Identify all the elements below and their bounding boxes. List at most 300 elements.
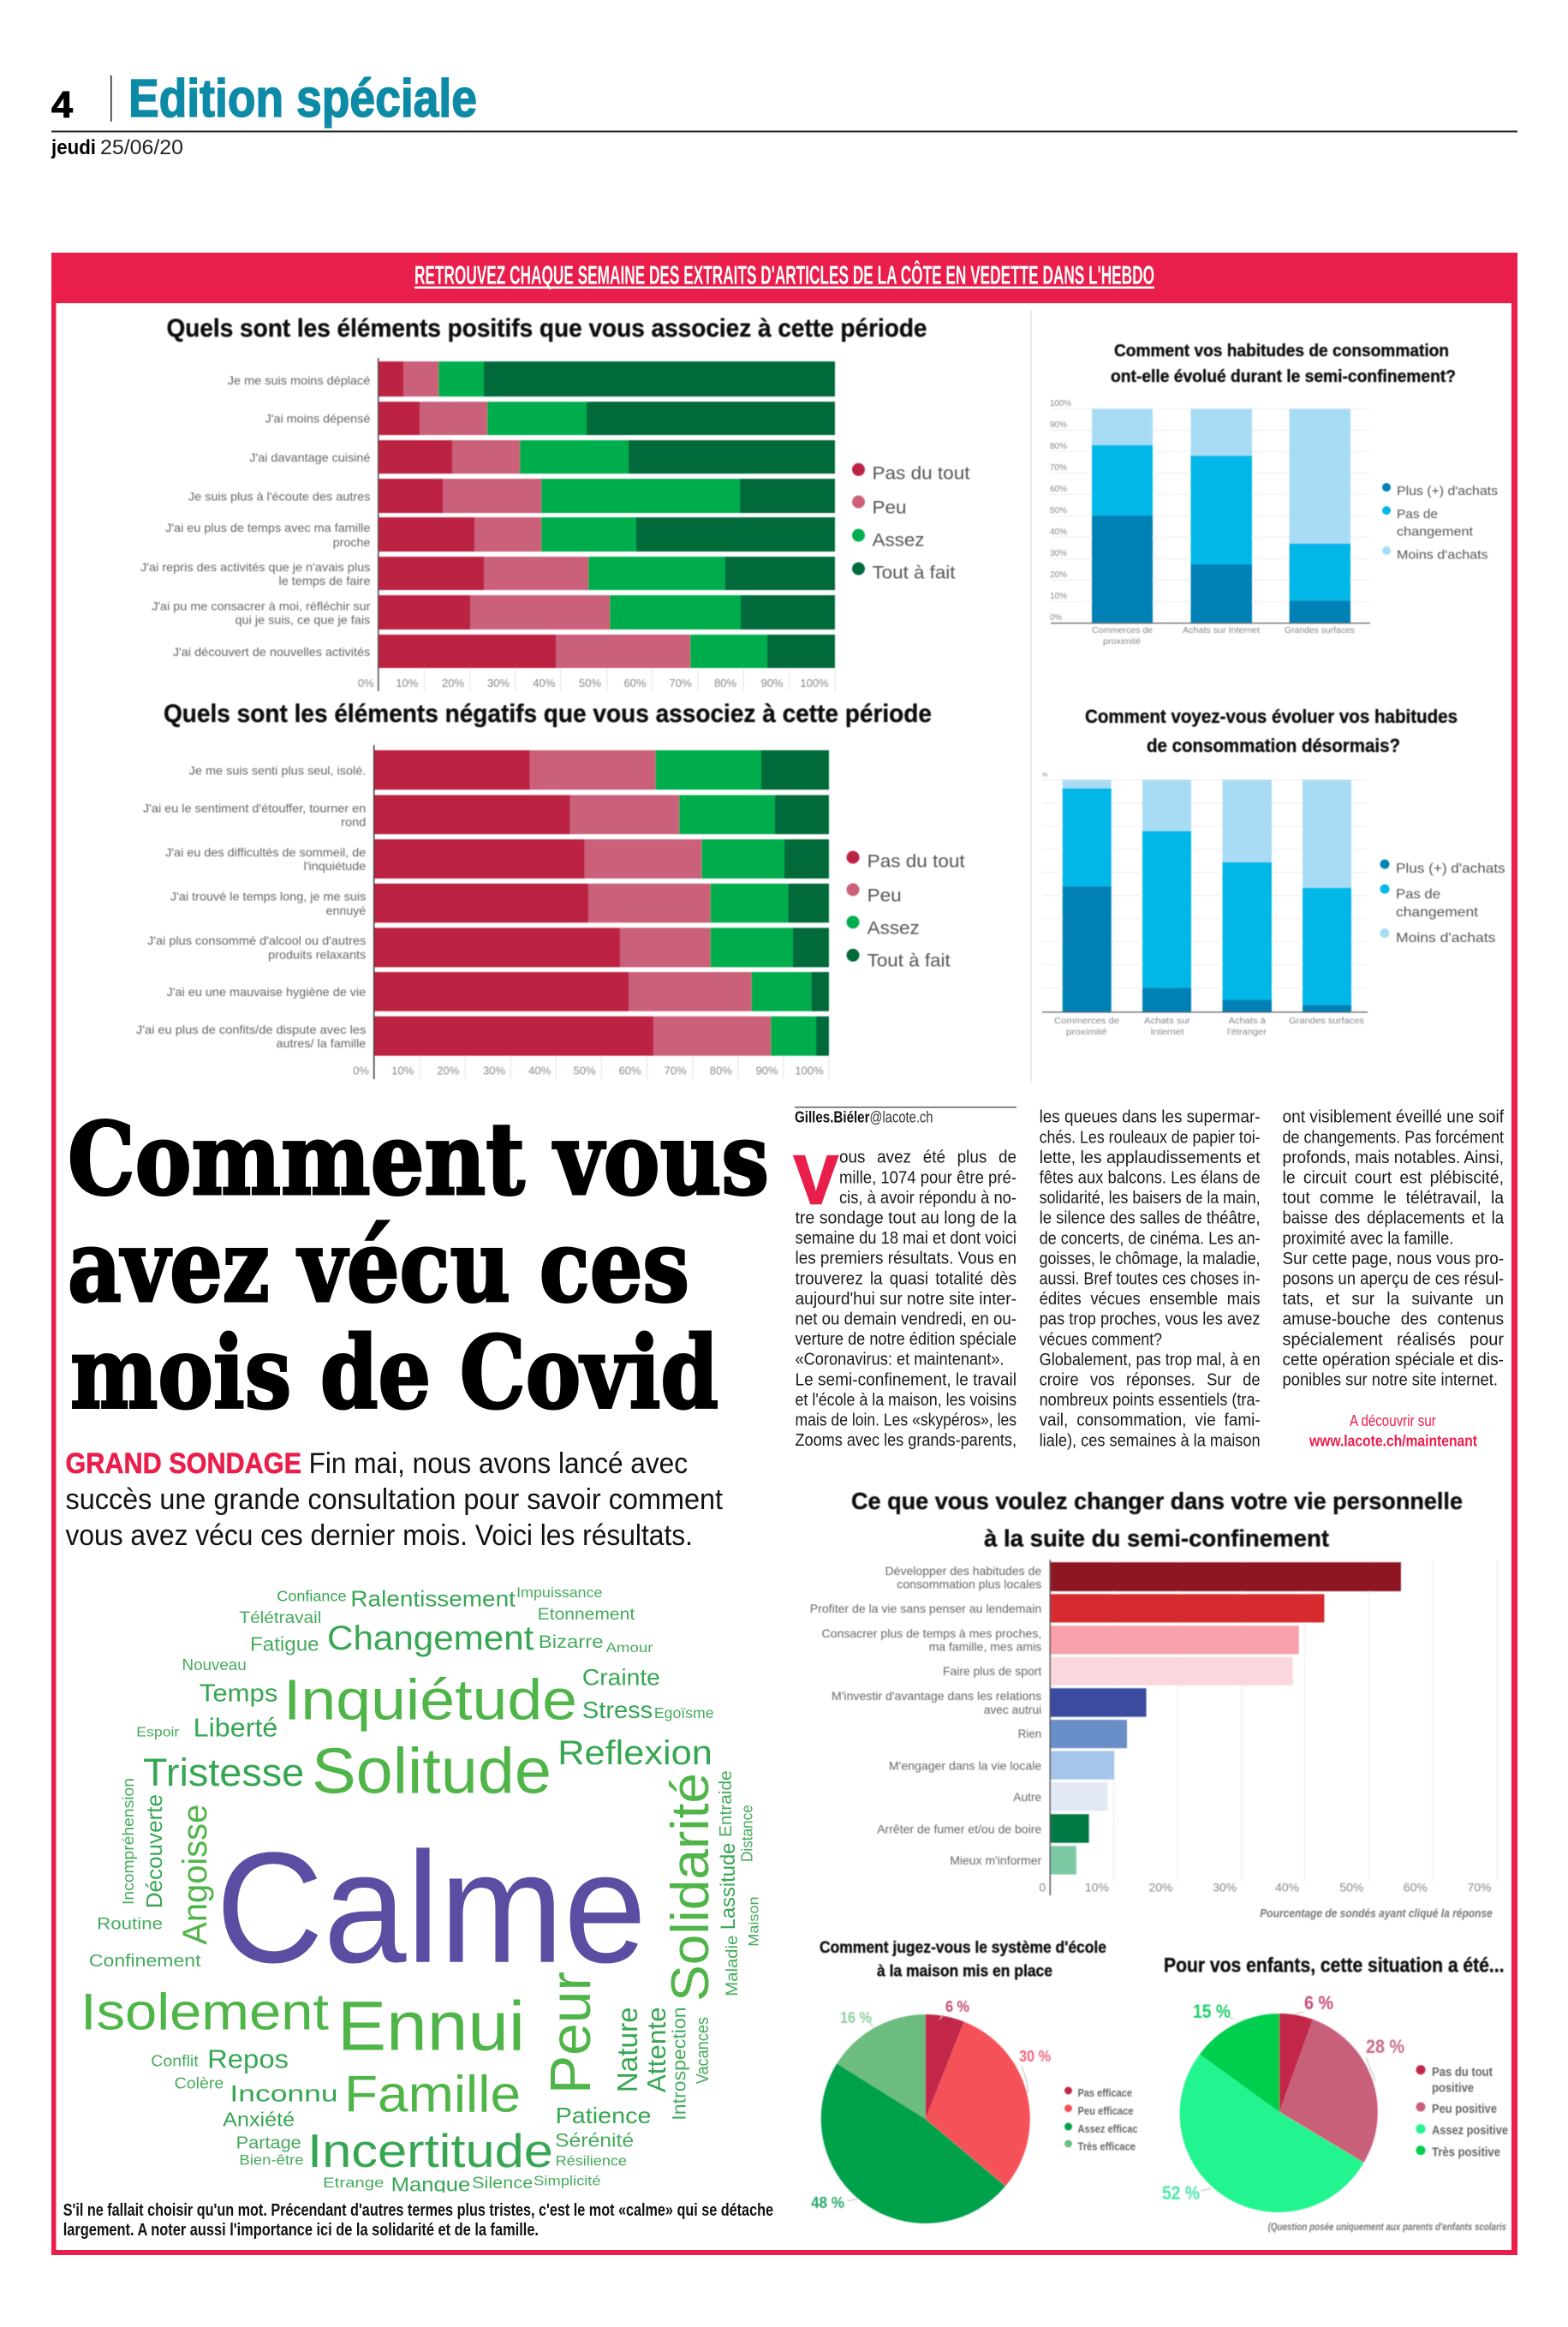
percent axis: 50% [1050,506,1067,516]
word cloud: Solidarité [661,1773,720,2002]
row labels: J'ai eu une mauvaise hygiène de vie [166,985,367,999]
article column 1: net ou demain vendredi, en ou- [795,1310,1017,1329]
link callout [1309,1412,1477,1450]
row labels: J'ai moins dépensé [265,411,371,425]
word cloud: Impuissance [516,1585,603,1601]
percent axis: 0 [1039,1881,1046,1894]
article column 2: fêtes aux balcons. Les élans de [1040,1168,1261,1187]
article column 1: mais de loin. Les «skypéros», les [795,1411,1017,1430]
row labels [136,764,367,1050]
word cloud: Inquiétude [283,1668,577,1732]
row labels: J'ai eu plus de temps avec ma famille [165,521,371,534]
date: jeudi [51,136,96,159]
legend [852,463,970,582]
word cloud: Attente [641,2007,671,2092]
horizontal bars [1050,1562,1401,1875]
percent axis: 30% [487,677,510,689]
legend [1380,860,1505,946]
legend: Pas de [1397,507,1438,522]
chart: positive elements [140,314,970,691]
word cloud: Bizarre [539,1632,603,1652]
row labels: J'ai eu des difficultés de sommeil, de [165,845,367,859]
percent axis: 20% [1050,570,1067,580]
article column 3: baisse des déplacements et la [1283,1209,1505,1228]
word cloud: Angoisse [176,1805,214,1945]
word cloud caption [63,2201,773,2240]
word cloud: Solitude [312,1734,551,1806]
row labels [140,373,371,659]
percentage labels [811,1998,1051,2211]
percent axis: 60% [623,677,647,689]
word cloud: Entraide [717,1770,736,1837]
row labels: Mieux m'informer [950,1853,1042,1867]
article column 2: les queues dans les supermar- [1040,1108,1261,1127]
standfirst [65,1447,724,1552]
word cloud: Maison [746,1896,762,1947]
column labels: Achats sur Internet [1183,626,1260,635]
main headline: avez vécu ces [68,1208,689,1325]
legend [1064,2086,1137,2153]
article column 2: de concerts, de cinéma. Les an- [1040,1229,1261,1248]
legend: Assez efficac [1077,2122,1137,2135]
row labels: avec autrui [984,1703,1041,1716]
word cloud: Routine [97,1914,163,1933]
percent axis: 80% [714,677,736,689]
standfirst: succès une grande consultation pour savoir comment [65,1483,724,1516]
pie [1180,2014,1378,2212]
word cloud: Distance [738,1805,755,1862]
legend: Pas du tout [867,852,965,872]
word cloud: Télétravail [239,1608,321,1627]
percent axis: 10% [396,677,419,689]
article column 3 [1283,1108,1505,1389]
column labels [1092,626,1355,647]
legend: positive [1432,2081,1474,2095]
word cloud: Ennui [337,1987,525,2065]
article column 2: liale), ces semaines à la maison [1040,1431,1261,1450]
legend: Plus (+) d'achats [1397,484,1498,498]
article column 2: vail, consommation, vie fami- [1040,1411,1261,1430]
legend: Peu efficace [1077,2104,1134,2117]
percent axis: 30% [1050,549,1067,558]
word cloud caption: largement. A noter aussi l'importance ici de la solidarité et de la famille. [63,2221,539,2240]
drop cap: V [794,1142,838,1218]
article column 1: Zooms avec les grands-parents, [795,1431,1017,1450]
article byline [795,1107,1017,1126]
word cloud: Nouveau [182,1656,247,1674]
row labels: l'inquiétude [303,859,367,873]
legend: Très efficace [1077,2139,1136,2153]
chart title: à la maison mis en place [877,1963,1052,1981]
column labels: proximité [1103,637,1141,647]
word cloud [80,1585,762,2195]
article column 1: verture de notre édition spéciale [795,1330,1017,1349]
row labels: Développer des habitudes de [885,1564,1041,1578]
percentage labels: 6 % [1304,1992,1333,2014]
row labels: J'ai davantage cuisiné [249,450,371,464]
row labels: Faire plus de sport [943,1664,1041,1678]
word cloud: Résilience [556,2154,627,2169]
legend: Tout à fait [872,563,956,582]
axis note: Pourcentage de sondés ayant cliqué la réponse [1260,1906,1493,1920]
row labels: J'ai plus consommé d'alcool ou d'autres [147,934,366,947]
word cloud: Ralentissement [350,1586,516,1612]
word cloud: Découverte [141,1794,167,1908]
percent axis: 50% [579,677,601,689]
percent axis: 90% [1050,421,1067,430]
chart: future consumption [1042,706,1505,1037]
percent axis: 0% [358,677,374,689]
article column 2: chés. Les rouleaux de papier toi- [1040,1128,1261,1147]
word cloud: Amour [606,1641,653,1656]
word cloud: Silence [472,2175,533,2193]
legend: Assez [872,531,925,551]
percent axis: 40% [533,677,556,689]
row labels: qui je suis, ce que je fais [235,613,370,627]
chart title: Comment voyez-vous évoluer vos habitudes [1085,706,1458,727]
page header [51,69,1517,159]
stacked columns [1092,409,1350,623]
percent axis: 10% [1085,1881,1109,1894]
article column 3: ont visiblement éveillé une soif [1283,1108,1504,1127]
article column 2: le silence des salles de théâtre, [1040,1209,1261,1228]
article column 3: le circuit court est plébiscité, [1283,1168,1504,1187]
percent axis: 30% [1213,1881,1237,1894]
article column 1: tre sondage tout au long de la [795,1209,1017,1228]
word cloud: Repos [207,2044,289,2073]
percent axis [1050,399,1071,623]
percent axis [358,677,829,689]
word cloud: Etrange [323,2175,384,2191]
chart title: Quels sont les éléments positifs que vous associez à cette période [166,314,927,343]
word cloud: Confiance [277,1587,346,1604]
percent axis: 100% [795,1064,824,1077]
link callout: A découvrir sur [1350,1412,1436,1429]
article column 1: trouverez la quasi totalité dès [795,1269,1017,1288]
chart title: de consommation désormais? [1147,735,1400,756]
row labels: proche [333,535,371,549]
column labels: Commerces de [1092,626,1153,635]
legend: Moins d'achats [1397,548,1488,562]
chart: what you want to change [810,1488,1497,1920]
column labels: Commerces de [1054,1017,1119,1026]
row labels: le temps de faire [279,574,371,588]
chart: consumption during semi-confinement [1050,342,1498,647]
percent axis: 0% [1050,613,1062,623]
column labels: l'étranger [1227,1028,1267,1037]
column labels: Achats à [1229,1017,1266,1026]
percent axis: 40% [1275,1881,1299,1894]
percent axis: 90% [756,1064,778,1077]
chart title: à la suite du semi-confinement [984,1524,1329,1552]
main headline: Comment vous [68,1101,769,1218]
word cloud: Lassitude [717,1843,740,1930]
word cloud: Confinement [89,1952,201,1971]
word cloud: Reflexion [557,1734,712,1772]
word cloud: Vacances [694,2017,712,2084]
row labels [810,1564,1042,1867]
percentage labels: 15 % [1193,2001,1231,2022]
percent axis: 40% [1050,528,1067,537]
word cloud: Introspection [668,2007,690,2121]
word cloud: Incertitude [307,2124,553,2177]
row labels: J'ai repris des activités que je n'avais plus [140,560,370,574]
chart title: Comment vos habitudes de consommation [1114,342,1449,361]
word cloud: Changement [327,1620,534,1657]
date [51,136,183,159]
word cloud: Stress [582,1697,653,1723]
percent axis [353,1064,824,1077]
percent axis: 100% [800,677,829,689]
row labels: rond [341,815,366,829]
percent axis: 20% [437,1064,460,1077]
legend: Tout à fait [867,952,951,971]
article column 3: amuse-bouche des contenus [1283,1310,1504,1329]
chart title [1111,342,1456,386]
legend [846,851,965,971]
word cloud: Fatigue [250,1632,319,1655]
standfirst: GRAND SONDAGE [65,1447,301,1480]
chart title: Quels sont les éléments négatifs que vous associez à cette période [164,700,932,728]
chart: school at home pie [811,1939,1137,2223]
row labels: autres/ la famille [276,1036,367,1050]
percent axis: 100% [1050,399,1071,409]
percent axis: 60% [1050,485,1067,494]
row labels: J'ai eu plus de confits/de dispute avec les [136,1023,366,1036]
row labels: ma famille, mes amis [929,1640,1041,1654]
stacked columns [1063,779,1351,1012]
word cloud: Peur [539,1972,603,2094]
legend: changement [1397,524,1474,540]
legend: Pas efficace [1077,2086,1132,2099]
article column 3: cette opération spéciale et dis- [1283,1351,1504,1369]
article column 2: vécues comment? [1040,1330,1162,1349]
row labels: Autre [1013,1790,1041,1804]
row labels: Je me suis senti plus seul, isolé. [189,764,366,778]
article column 2 [1040,1108,1261,1450]
word cloud: Isolement [80,1983,329,2040]
word cloud: Colère [175,2073,224,2091]
legend: Pas du tout [872,463,970,483]
article column 3: ponibles sur notre site internet. [1283,1370,1498,1389]
percent axis: 20% [442,677,464,689]
row labels: consommation plus locales [897,1578,1041,1591]
article column 3: Sur cette page, nous vous pro- [1283,1250,1504,1268]
row labels: M'investir d'avantage dans les relations [832,1689,1041,1703]
word cloud caption: S'il ne fallait choisir qu'un mot. Précendant d'autres termes plus tristes, c'est le mot «calme» qui se détache [63,2201,773,2220]
percent axis: 40% [528,1064,551,1077]
article column 3: profonds, mais notables. Ainsi, [1283,1149,1504,1167]
percent axis: 70% [669,677,692,689]
legend: Plus (+) d'achats [1396,862,1505,876]
word cloud: Conflit [151,2053,199,2070]
article column 2: croire vos réponses. Sur de [1040,1370,1261,1389]
legend: Pas du tout [1432,2065,1493,2079]
article column 3: tats, et sur la suivante un [1283,1290,1504,1309]
article column 1 [794,1142,1017,1450]
word cloud: Bien-être [239,2153,304,2169]
word cloud: Incompréhension [120,1778,137,1905]
article column 3: proximité avec la famille. [1283,1229,1453,1248]
stacked bars [379,361,835,668]
standfirst: Fin mai, nous avons lancé avec [309,1447,688,1480]
page number: 4 [51,84,74,126]
column labels: Internet [1151,1028,1184,1037]
row labels: Rien [1018,1727,1041,1740]
percent axis: 80% [710,1064,732,1077]
row labels: Profiter de la vie sans penser au lendemain [810,1602,1041,1615]
percent axis: 10% [1050,592,1067,601]
standfirst: vous avez vécu ces dernier mois. Voici les résultats. [65,1519,693,1552]
column labels: Achats sur [1144,1017,1191,1026]
word cloud: Espoir [136,1725,180,1739]
row labels: ennuyé [326,904,367,917]
word cloud: Nature [611,2007,643,2092]
legend: Assez [867,918,920,938]
percentage labels [1162,1992,1404,2204]
word cloud: Partage [236,2133,301,2152]
percent axis: 60% [619,1064,641,1077]
percent axis: 30% [483,1064,506,1077]
chart: children situation pie [1162,1954,1508,2233]
percent axis: 50% [573,1064,596,1077]
article column 2: nombreux points essentiels (tra- [1040,1391,1261,1410]
row labels: Je me suis moins déplacé [228,373,371,387]
article column 3: de changements. Pas forcément [1283,1128,1504,1147]
article column 1: semaine du 18 mai et dont voici [795,1229,1017,1248]
word cloud: Anxiété [223,2108,295,2130]
percentage labels: 6 % [945,1998,969,2015]
word cloud: Maladie [724,1936,742,1996]
word cloud: Simplicité [534,2175,601,2189]
percent axis: 50% [1339,1881,1363,1894]
percent axis: 60% [1404,1881,1428,1894]
percent axis: 70% [1050,463,1067,473]
percent axis: 80% [1050,442,1067,451]
dominant word: Calme [216,1819,647,1996]
percent axis: 20% [1148,1881,1173,1894]
chart title [820,1939,1106,1981]
word cloud: Egoïsme [654,1704,714,1721]
row labels: J'ai pu me consacrer à moi, réfléchir sur [152,600,371,613]
legend: Peu [872,498,906,517]
row labels: Arrêter de fumer et/ou de boire [877,1822,1041,1835]
article column 1: aujourd'hui sur notre site inter- [795,1290,1017,1309]
percentage labels: 28 % [1366,2036,1404,2057]
row labels: J'ai découvert de nouvelles activités [173,645,370,659]
chart: negative elements [136,700,965,1079]
column labels: proximité [1066,1028,1107,1037]
percent axis: 70% [1467,1881,1492,1894]
article column 1: Le semi-confinement, le travail [795,1370,1017,1389]
percent axis: 0% [353,1064,369,1077]
column labels [1054,1017,1364,1037]
legend [1382,483,1498,562]
article column 3: posons un aperçu de ces résul- [1283,1269,1504,1288]
word cloud: Sérénité [555,2130,634,2151]
word cloud: Inconnu [230,2080,338,2106]
word cloud: Temps [200,1680,277,1708]
percent axis [1039,1881,1492,1894]
word cloud: Tristesse [143,1751,304,1794]
chart title: Ce que vous voulez changer dans votre vie personnelle [851,1488,1463,1514]
chart title [1085,706,1458,756]
percent axis: 10% [391,1064,414,1077]
legend: Assez positive [1432,2123,1508,2138]
main headline: mois de Covid [70,1316,718,1432]
word cloud: Etonnement [538,1606,635,1624]
chart title: Comment jugez-vous le système d'école [820,1939,1106,1957]
word cloud: Famille [344,2066,521,2123]
legend: changement [1396,905,1479,920]
article column 2: lette, les applaudissements et [1040,1149,1261,1167]
footnote: (Question posée uniquement aux parents d'enfants scolaris [1268,2221,1506,2233]
legend: Très positive [1432,2145,1500,2160]
legend: Peu [867,886,902,906]
legend: Peu positive [1432,2102,1497,2116]
chart title: ont-elle évolué durant le semi-confinement? [1111,367,1456,386]
legend: Pas de [1396,887,1440,902]
article column 1: les premiers résultats. Vous en [795,1250,1017,1268]
row labels: J'ai trouvé le temps long, je me suis [170,889,366,903]
section title: Edition spéciale [128,69,477,128]
word cloud: Liberté [194,1713,277,1742]
article column 2: édites vécues ensemble mais [1040,1290,1261,1309]
stacked bars [374,750,829,1056]
link callout: www.lacote.ch/maintenant [1309,1433,1477,1450]
article byline: Gilles.Biéler [795,1109,870,1126]
article byline: @lacote.ch [870,1109,933,1126]
column labels: Grandes surfaces [1289,1017,1364,1026]
article column 2: pas trop proches, vous les avez [1040,1310,1261,1329]
percent axis: 90% [760,677,784,689]
percentage labels: 48 % [811,2194,844,2211]
chart: future consumption: % [1042,773,1047,779]
percentage labels: 16 % [840,2009,872,2026]
date: 25/06/20 [100,136,183,159]
article column 1: mille, 1074 pour être pré- [839,1168,1017,1187]
article column 1: ous avez été plus de [839,1149,1017,1167]
word cloud: Patience [556,2103,651,2128]
percentage labels: 52 % [1162,2182,1200,2204]
article column 2: aussi. Bref toutes ces choses in- [1040,1269,1261,1288]
legend [1416,2065,1508,2160]
article column 1: «Coronavirus: et maintenant». [795,1351,1004,1369]
word cloud: Manque [391,2173,470,2195]
article column 3: tout comme le télétravail, la [1283,1189,1505,1208]
chart title [851,1488,1463,1552]
article column 3: spécialement réalisés pour [1283,1330,1504,1349]
column labels: Grandes surfaces [1285,626,1355,635]
article column 2: solidarité, les baisers de la main, [1040,1189,1261,1208]
article column 1: et l'école à la maison, les voisins [795,1391,1017,1410]
row labels: Je suis plus à l'écoute des autres [188,490,370,504]
article column 2: Globalement, pas trop mal, à en [1040,1351,1261,1369]
word cloud: Crainte [582,1665,660,1691]
row labels: M'engager dans la vie locale [889,1758,1041,1772]
percentage labels: 30 % [1019,2048,1051,2065]
row labels: Consacrer plus de temps à mes proches, [822,1626,1041,1640]
chart title: Pour vos enfants, cette situation a été... [1164,1954,1504,1978]
article column 1: cis, à avoir répondu à no- [839,1189,1017,1208]
pie [821,2014,1030,2223]
row labels: J'ai eu le sentiment d'étouffer, tourner en [143,802,366,815]
article column 2: goisses, le chômage, la maladie, [1040,1250,1261,1268]
row labels: produits relaxants [268,947,366,961]
legend: Moins d'achats [1396,931,1495,946]
percent axis: 70% [665,1064,687,1077]
main headline [68,1101,769,1432]
